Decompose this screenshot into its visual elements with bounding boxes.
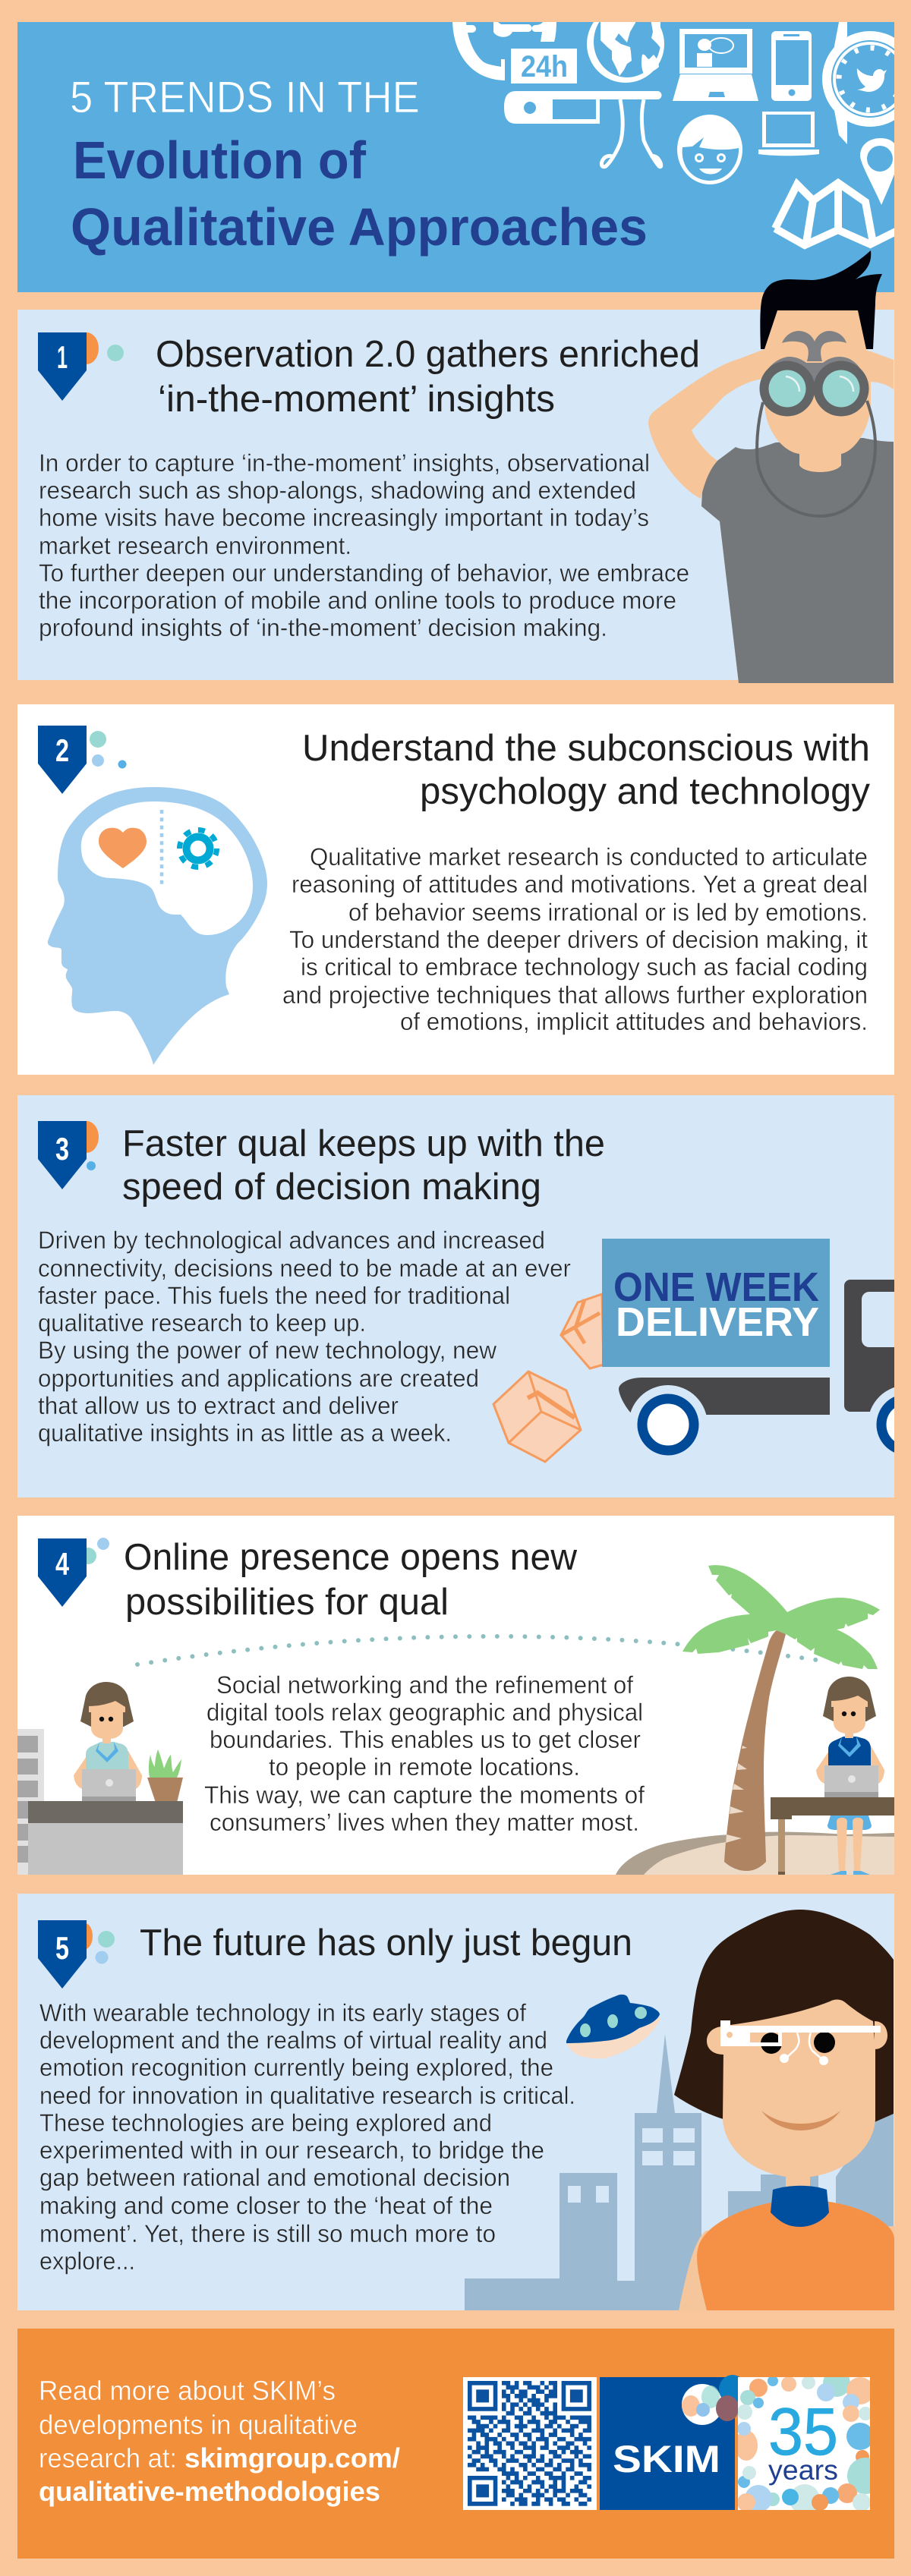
footer text: developments in qualitative [39,2409,358,2440]
body text 4: This way, we can capture the moments of [204,1781,645,1809]
heading 3: speed of decision making [122,1167,541,1208]
truck label: one week delivery: ONE WEEK [613,1264,819,1310]
smart glasses [720,2020,881,2065]
footer text: skimgroup.com/ [184,2442,400,2474]
number badge 5 [38,1920,87,1989]
heading 1 [156,334,700,420]
body text 1 [39,449,689,641]
illustration: man with binoculars [648,250,894,683]
heading 2: psychology and technology [420,771,870,812]
QR code [463,2377,597,2510]
logo: 35 years: years [768,2455,838,2486]
footer text [39,2375,400,2507]
body text 2: and projective techniques that allows further exploration [282,981,868,1009]
icon: location pin [860,138,894,205]
body text 2: reasoning of attitudes and motivations. Yet a great deal [292,871,868,898]
dotted connection arc [137,1636,816,1664]
title: 5 trends in the: 5 TRENDS IN THE [70,73,420,122]
body text 3: By using the power of new technology, new [38,1337,497,1364]
icon: clock arc and puzzle piece [452,19,556,80]
truck label: one week delivery: DELIVERY [616,1299,819,1345]
body text 4: consumers’ lives when they matter most. [210,1809,639,1836]
icon: flying saucer [566,1995,661,2058]
heading 4: possibilities for qual [125,1582,449,1623]
body text 5: gap between rational and emotional decision [39,2164,510,2191]
illustration: head with heart and gear [48,787,267,1065]
number badge 2: 2 [55,732,69,768]
decorative dots 2 [90,731,126,768]
number badge 4: 4 [55,1546,69,1582]
body text 1: profound insights of ‘in-the-moment’ decision making. [39,614,607,641]
body text 5: With wearable technology in its early stages of [39,1999,526,2026]
decorative dots 3 [74,1121,99,1170]
footer text: research at: [39,2442,177,2474]
body text 3: Driven by technological advances and increased [38,1227,545,1254]
icon: small parcel [561,1294,604,1368]
decorative dots 5 [77,1923,115,1964]
body text 3 [38,1227,571,1447]
illustration: office worker at desk [17,1682,183,1875]
icon: globe [587,22,664,83]
panel: observation [17,250,894,683]
truck label: one week delivery [615,1272,818,1336]
body text 2: of behavior seems irrational or is led by emotions. [348,899,868,926]
panel: header [17,5,911,292]
number badge 5: 5 [55,1930,69,1966]
heading 5: The future has only just begun [140,1923,632,1963]
body text 1: To further deepen our understanding of behavior, we embrace [39,559,689,587]
body text 1: home visits have become increasingly important in today’s [39,504,649,531]
illustration: island with palm tree and remote worker [616,1565,894,1875]
panel: subconscious [17,704,894,1075]
icon: gear [179,830,217,867]
heading 3 [122,1123,605,1208]
body text 2 [282,843,868,1035]
body text 4: digital tools relax geographic and physical [206,1699,643,1726]
body text 2: Qualitative market research is conducted to articulate [310,843,868,871]
heading 3: Faster qual keeps up with the [122,1123,605,1164]
body text 1: research such as shop-alongs, shadowing and extended [39,477,636,504]
body text 4 [204,1671,645,1836]
decorative dots 1 [74,332,124,364]
heading 4 [124,1537,578,1623]
body text 5: moment’. Yet, there is still so much more to [39,2220,496,2247]
illustration: city skyline [465,2034,894,2310]
panel: footer call to action [17,2329,894,2559]
heading 2: Understand the subconscious with [302,728,870,769]
icon: large parcel [493,1371,581,1462]
body text 1: market research environment. [39,532,351,559]
icon: smiling face [677,115,742,184]
body text 5: explore... [39,2247,135,2275]
icon: smartphone [771,31,812,101]
heading 4: Online presence opens new [124,1537,578,1578]
body text 5: These technologies are being explored and [39,2109,492,2137]
body text 1: In order to capture ‘in-the-moment’ insights, observational [39,449,650,477]
footer text: Read more about SKIM’s [39,2375,336,2406]
body text 5: emotion recognition currently being explored, the [39,2054,553,2081]
heading 1: Observation 2.0 gathers enriched [156,334,700,375]
body text 3: that allow us to extract and deliver [38,1392,399,1419]
panel: online presence [17,1516,894,1875]
body text 2: To understand the deeper drivers of decision making, it [289,926,868,953]
body text 5: development and the realms of virtual reality and [39,2026,547,2054]
body text 5: experimented with in our research, to bridge the [39,2137,544,2164]
header technology icons [452,5,911,245]
icon: folded map [775,183,896,245]
icon: potted plant [147,1749,183,1803]
illustration: delivery truck [602,1239,911,1464]
body text 3: qualitative research to keep up. [38,1309,366,1337]
icon: heart [99,828,147,868]
icon: 24h box: 24h [521,50,568,83]
title: evolution of qualitative approaches: Qualitative Approaches [71,197,648,257]
body text 2: of emotions, implicit attitudes and behaviors. [400,1008,868,1035]
heading 1: ‘in-the-moment’ insights [158,379,555,420]
panel: future [17,1894,894,2310]
panel: faster qual [17,1095,911,1497]
heading 2 [302,728,870,812]
body text 1: the incorporation of mobile and online tools to produce more [39,587,676,614]
number badge 1 [38,332,87,401]
icon: laptop with video chat [673,29,758,101]
body text 5 [39,1999,575,2275]
body text 5: making and come closer to the ‘heat of the [39,2192,493,2219]
body text 3: qualitative insights in as little as a week. [38,1419,452,1447]
footer text: qualitative-methodologies [39,2476,380,2507]
body text 4: Social networking and the refinement of [216,1671,633,1699]
body text 4: to people in remote locations. [269,1753,580,1781]
title: evolution of qualitative approaches [71,131,648,257]
number badge 3: 3 [55,1131,69,1167]
body text 3: faster pace. This fuels the need for traditional [38,1282,510,1309]
body text 4: boundaries. This enables us to get closer [210,1726,641,1753]
number badge 1: 1 [57,339,68,375]
logo: SKIM [600,2375,746,2510]
logo: 35 years [738,2377,870,2510]
body text 5: need for innovation in qualitative research is critical. [39,2082,575,2109]
logo: SKIM: SKIM [613,2438,720,2480]
logo: 35 years: 35 [768,2394,838,2469]
body text 2: is critical to embrace technology such as facial coding [301,953,868,981]
illustration: woman with smart glasses [674,1910,894,2310]
body text 3: connectivity, decisions need to be made at an ever [38,1255,571,1282]
number badge 4 [38,1538,87,1607]
icon: usb stick and earphones [504,91,662,167]
icon: small laptop [758,112,819,156]
number badge 3 [38,1121,87,1189]
body text 3: opportunities and applications are created [38,1365,479,1392]
number badge 2 [38,726,87,794]
icon: twitter badge [822,22,894,144]
title: evolution of qualitative approaches: Evolution of [73,131,367,190]
decorative dots 4 [80,1538,109,1564]
